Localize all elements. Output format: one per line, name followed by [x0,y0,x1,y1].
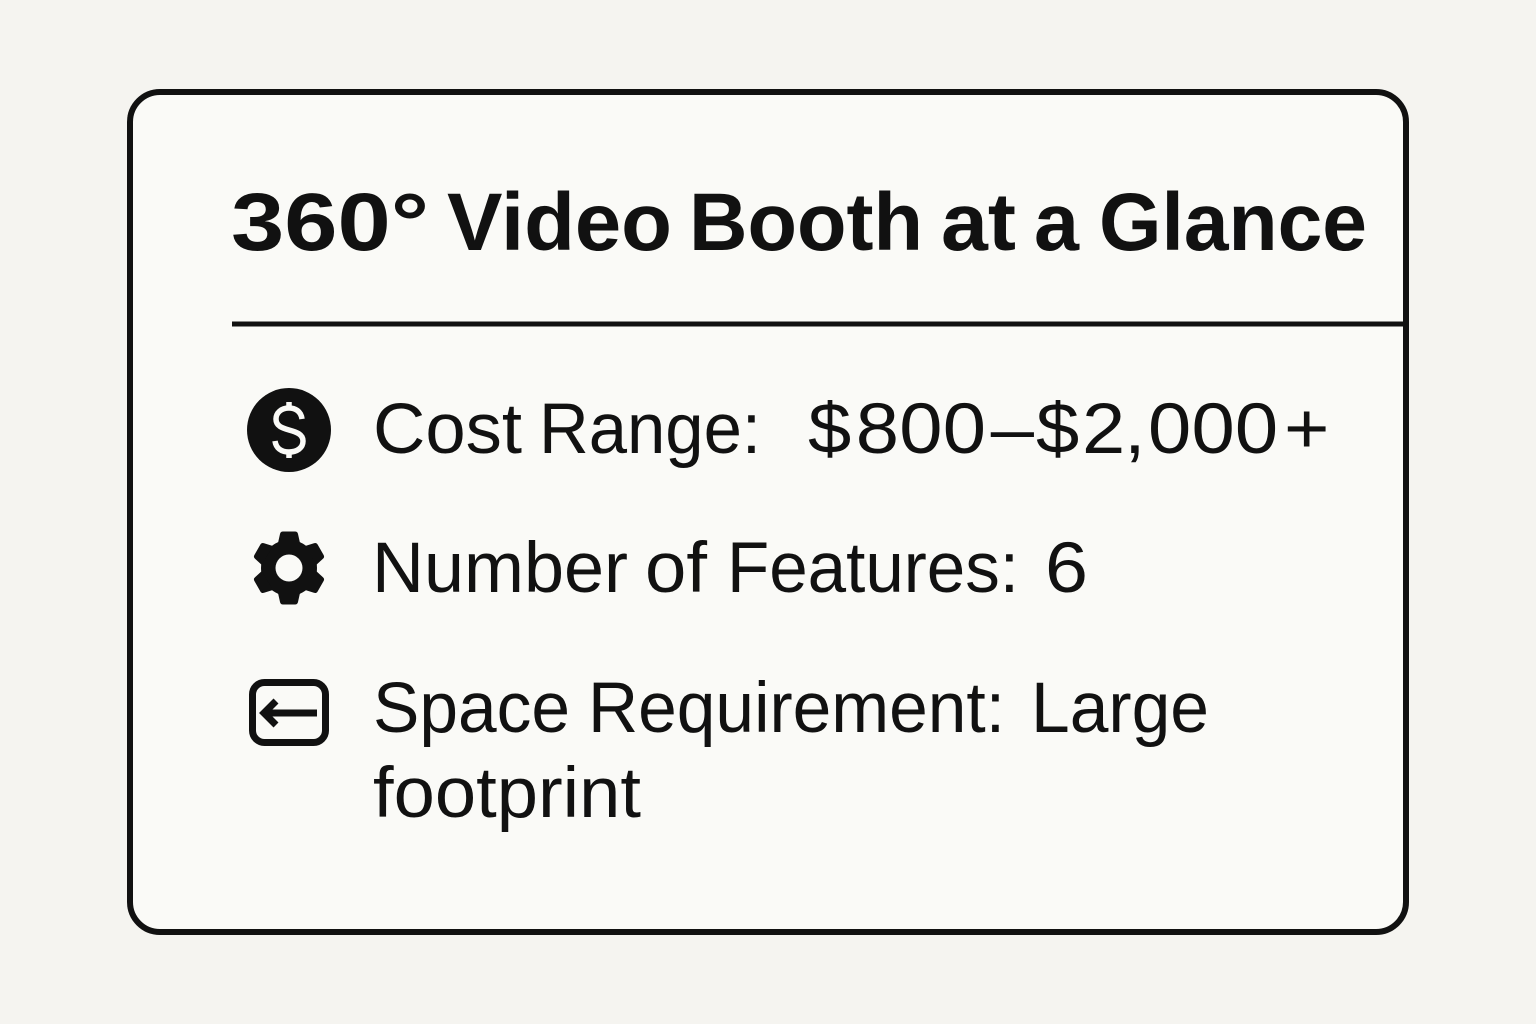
value: number of features: 6 [1045,529,1088,608]
label: number of features: Features: [727,529,1019,608]
label: cost range: Range: [539,390,761,469]
value: cost range: $800–$2,000+ [808,389,1329,468]
label: cost range: Cost [373,390,522,469]
value: space requirement: footprint [373,754,641,833]
label: number of features: of [645,529,707,608]
label: space requirement: Space [373,669,570,748]
title: Video [447,177,672,268]
title: 360° [231,177,429,268]
title: Booth [689,177,923,268]
row: cost range [247,388,1329,472]
label: number of features [372,529,1019,608]
title: at [941,177,1016,268]
title [231,177,1367,268]
title: Glance [1099,177,1367,268]
label: space requirement: Requirement: [588,669,1005,748]
value: space requirement [373,669,1209,833]
row: number of features [252,529,1088,608]
icon: space arrow [252,682,326,742]
title: a [1034,177,1080,268]
icon: gear [252,532,326,604]
label: space requirement [373,669,1005,748]
panel: info card [130,92,1406,932]
label: cost range [373,390,761,469]
label: number of features: Number [372,529,628,608]
row: space requirement [252,669,1209,833]
icon: dollar coin [247,388,331,472]
value: space requirement: Large [1031,669,1209,748]
